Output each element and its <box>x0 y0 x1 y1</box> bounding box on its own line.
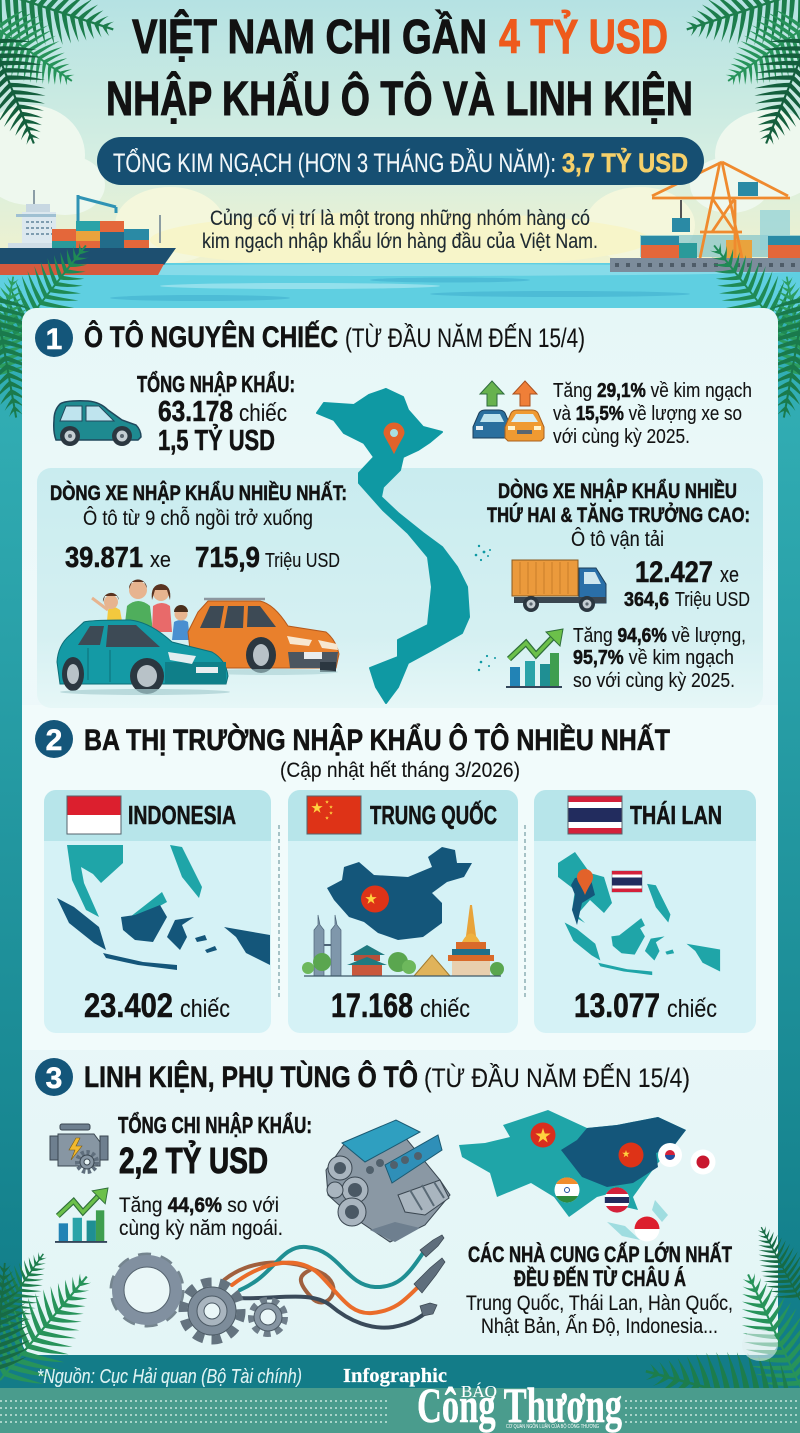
parts total: 2,2 TỶ USD <box>119 1140 268 1181</box>
icon: teal car <box>54 401 141 446</box>
truck growth note: Tăng 94,6% về lượng, <box>573 625 746 647</box>
icon: arrows above cars <box>473 381 544 441</box>
map: Indonesia <box>57 845 270 970</box>
small Thai flag <box>612 871 642 892</box>
top car type text: 715,9 <box>195 542 260 574</box>
icon: pin <box>577 869 593 895</box>
suppliers text: Nhật Bản, Ấn Độ, Indonesia... <box>481 1315 718 1338</box>
top car type text: DÒNG XE NHẬP KHẨU NHIỀU NHẤT: <box>50 481 347 505</box>
growth note <box>553 380 752 448</box>
total value pill: TỔNG KIM NGẠCH (HƠN 3 THÁNG ĐẦU NĂM): <box>113 147 556 178</box>
icon: growth chart <box>55 1188 108 1242</box>
market card: Indonesia: 23.402 <box>84 987 173 1025</box>
illustration: engine <box>326 1120 450 1242</box>
market card: Indonesia <box>44 790 271 1033</box>
newspaper logo: BÁO <box>461 1382 497 1401</box>
flag: China <box>307 796 361 834</box>
cargo ship <box>0 190 176 275</box>
newspaper logo: CƠ QUAN NGÔN LUẬN CỦA BỘ CÔNG THƯƠNG <box>506 1423 599 1430</box>
growth note: và 15,5% về lượng xe so <box>553 403 742 425</box>
suppliers text <box>466 1242 733 1338</box>
flag: India <box>554 1177 580 1203</box>
flag: China <box>618 1142 644 1168</box>
market card: Thailand: THÁI LAN <box>630 800 722 830</box>
main white panel <box>22 308 778 1355</box>
second car type text: Triệu USD <box>675 589 750 611</box>
Vietnam map <box>317 389 469 703</box>
palm fronds: bottom right <box>634 1216 800 1433</box>
icon: engine with gear <box>50 1124 108 1171</box>
section 3 heading <box>35 1058 690 1096</box>
illustration: family <box>92 579 190 640</box>
dashed dividers <box>279 825 525 998</box>
flag: Thailand <box>568 796 622 834</box>
flag: Indonesia <box>67 796 121 834</box>
parts growth note: cùng kỳ năm ngoái. <box>119 1217 283 1240</box>
second car type text: DÒNG XE NHẬP KHẨU NHIỀU <box>498 479 737 503</box>
market card: China: chiếc <box>420 995 470 1023</box>
second car type text: 12.427 <box>635 556 713 589</box>
second car type text: Ô tô vận tải <box>571 528 664 551</box>
intro text: Củng cố vị trí là một trong những nhóm hàng có <box>210 207 590 230</box>
icon: truck <box>512 560 606 612</box>
truck growth note: 95,7% về kim ngạch <box>573 647 734 669</box>
flag: Thailand <box>604 1187 630 1213</box>
map: Southeast Asia <box>558 852 720 975</box>
parts growth note: Tăng 44,6% so với <box>119 1194 279 1217</box>
top car type text: xe <box>150 547 171 572</box>
palm fronds: middle sides behind panel <box>0 224 800 424</box>
port crane and dock <box>610 162 800 272</box>
offshore islands <box>475 545 496 671</box>
illustration: cables <box>224 1247 429 1328</box>
map: China <box>327 847 472 940</box>
footer source strip <box>0 1355 800 1388</box>
flag: Japan <box>690 1150 716 1174</box>
teal side background <box>0 300 800 1390</box>
title: 4 TỶ USD <box>499 9 668 64</box>
illustration: gears <box>114 1257 285 1340</box>
section 3 heading: (TỪ ĐẦU NĂM ĐẾN 15/4) <box>424 1062 690 1093</box>
sea <box>0 263 800 313</box>
market card: Indonesia: chiếc <box>180 995 230 1023</box>
section 2 heading: 2 <box>46 724 62 757</box>
market card: China <box>288 790 518 1033</box>
palm fronds: top right <box>674 0 800 158</box>
intro text: kim ngạch nhập khẩu lớn hàng đầu của Việt Nam. <box>202 230 598 253</box>
background clouds <box>0 105 800 268</box>
market card: Indonesia: INDONESIA <box>128 800 236 830</box>
footer band <box>0 1388 800 1433</box>
market card: Thailand: 13.077 <box>574 987 660 1025</box>
growth note: với cùng kỳ 2025. <box>553 426 690 448</box>
newspaper logo: Công Thương <box>417 1377 622 1433</box>
total imports block: TỔNG NHẬP KHẨU: <box>137 370 295 397</box>
total value pill: 3,7 TỶ USD <box>562 146 688 178</box>
background sky <box>0 0 800 275</box>
second car type text: xe <box>720 562 739 587</box>
icon: growth chart <box>506 629 563 687</box>
section 2 heading: (Cập nhật hết tháng 3/2026) <box>280 759 520 782</box>
icon: map pin on Hanoi <box>384 423 404 453</box>
market card: Thailand <box>534 790 756 1033</box>
intro text <box>202 207 598 253</box>
section 1 heading: 1 <box>46 323 62 356</box>
illustration: Asian landmarks <box>302 905 504 976</box>
total imports block: chiếc <box>239 400 287 427</box>
source note: *Nguồn: Cục Hải quan (Bộ Tài chính) <box>37 1366 302 1388</box>
map: Asia suppliers <box>459 1110 716 1242</box>
flag: Vietnam <box>530 1122 556 1148</box>
market card: China: 17.168 <box>331 987 413 1025</box>
icon: cable connectors <box>414 1235 445 1316</box>
total imports block: 1,5 TỶ USD <box>158 423 275 457</box>
palm fronds: top left <box>0 0 126 158</box>
top car type text: Triệu USD <box>265 550 340 572</box>
parts total: TỔNG CHI NHẬP KHẨU: <box>118 1111 312 1138</box>
title: VIỆT NAM CHI GẦN <box>132 9 487 64</box>
palm fronds: bottom left <box>0 1239 116 1405</box>
illustration: orange SUV <box>188 599 339 675</box>
total imports block: 63.178 <box>158 396 233 428</box>
market card: Thailand: chiếc <box>667 995 717 1023</box>
top car type text: Ô tô từ 9 chỗ ngồi trở xuống <box>83 507 313 530</box>
truck growth note: so với cùng kỳ 2025. <box>573 670 735 692</box>
parts growth note <box>119 1194 283 1240</box>
second car type text <box>487 479 750 611</box>
illustration: teal hatchback <box>57 620 230 695</box>
section 2 heading: BA THỊ TRƯỜNG NHẬP KHẨU Ô TÔ NHIỀU NHẤT <box>84 723 670 757</box>
title <box>106 9 693 126</box>
section 3 heading: LINH KIỆN, PHỤ TÙNG Ô TÔ <box>84 1060 418 1094</box>
truck growth note <box>573 625 746 692</box>
suppliers text: Trung Quốc, Thái Lan, Hàn Quốc, <box>466 1292 733 1315</box>
top car type text: 39.871 <box>65 542 143 574</box>
parts total <box>118 1111 312 1181</box>
infographic label: Infographic <box>343 1365 447 1387</box>
newspaper logo <box>417 1377 622 1433</box>
total value pill <box>97 137 704 185</box>
market card: China: TRUNG QUỐC <box>370 800 497 830</box>
section 1 heading <box>35 319 585 357</box>
inner tinted panel <box>37 468 763 708</box>
section 1 heading: (TỪ ĐẦU NĂM ĐẾN 15/4) <box>345 322 585 353</box>
suppliers text: ĐỀU ĐẾN TỪ CHÂU Á <box>514 1266 686 1291</box>
growth note: Tăng 29,1% về kim ngạch <box>553 380 752 402</box>
top car type text <box>50 481 347 574</box>
flag: Indonesia <box>634 1216 660 1242</box>
second car type text: 364,6 <box>624 589 669 611</box>
section 1 heading: Ô TÔ NGUYÊN CHIẾC <box>84 320 338 354</box>
section 2 heading <box>35 720 670 782</box>
total imports block <box>137 370 295 457</box>
flag: Korea <box>658 1143 682 1167</box>
section 3 heading: 3 <box>46 1062 62 1095</box>
